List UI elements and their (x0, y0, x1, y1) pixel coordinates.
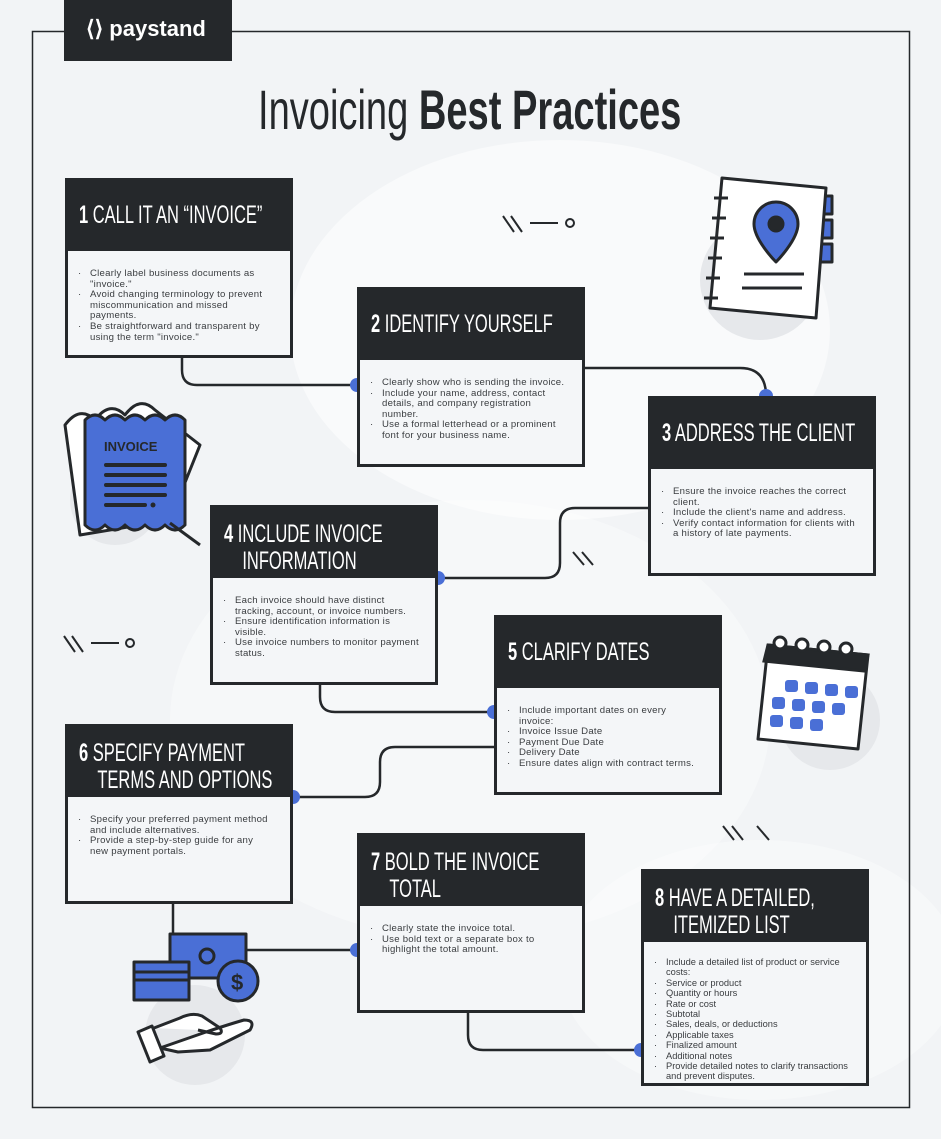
title: Invoicing Best Practices (258, 78, 681, 141)
box 4 (210, 505, 438, 685)
box 1: Be straightforward and transparent by using the term "invoice." (90, 321, 260, 343)
box 8: Additional notes (666, 1051, 732, 1061)
box 1 (65, 178, 293, 358)
box 5: Delivery Date (519, 747, 580, 758)
box 7: Clearly state the invoice total. (382, 923, 515, 934)
box 4: 4 INCLUDE INVOICE (224, 520, 383, 548)
box 4: Use invoice numbers to monitor payment status. (235, 637, 419, 659)
icon: calendar (756, 636, 880, 770)
box 8: Include a detailed list of product or service costs: (666, 957, 840, 977)
box 3: Include the client's name and address. (673, 507, 846, 518)
box 8 (641, 869, 869, 1086)
box 6: 6 SPECIFY PAYMENT (79, 739, 245, 767)
box 5: Invoice Issue Date (519, 726, 602, 737)
box 6: Specify your preferred payment method and include alternatives. (90, 814, 268, 836)
icon: payment hand (132, 932, 260, 1085)
box 8: Sales, deals, or deductions (666, 1019, 778, 1029)
box 7: 7 BOLD THE INVOICE (371, 848, 539, 876)
box 2 (357, 287, 585, 467)
hand (138, 1014, 252, 1062)
box 5: 5 CLARIFY DATES (508, 638, 650, 666)
box 1: 1 CALL IT AN “INVOICE” (79, 201, 262, 229)
box 7 (357, 833, 585, 1013)
box 3 (648, 396, 876, 576)
box 5: Payment Due Date (519, 737, 604, 748)
box 8: Subtotal (666, 1009, 700, 1019)
box 8: Service or product (666, 978, 741, 988)
box 6 (65, 724, 293, 904)
box 3: 3 ADDRESS THE CLIENT (662, 419, 855, 447)
box 2: Clearly show who is sending the invoice. (382, 377, 564, 388)
box 3: Verify contact information for clients with a history of late payments. (673, 518, 855, 539)
box 8: Quantity or hours (666, 988, 737, 998)
box 8: ITEMIZED LIST (673, 911, 790, 939)
icon: notebook (700, 176, 834, 340)
box 1: Clearly label business documents as "invoice." (90, 268, 254, 290)
logo (64, 0, 232, 61)
icon: invoice receipt: INVOICE (104, 439, 158, 454)
box 8: Rate or cost (666, 999, 716, 1009)
box 4: INFORMATION (242, 547, 357, 575)
box 4: Ensure identification information is visible. (235, 616, 390, 638)
box 1: Avoid changing terminology to prevent miscommunication and missed payments. (90, 289, 262, 321)
box 5 (494, 615, 722, 795)
box 8: 8 HAVE A DETAILED, (655, 884, 815, 912)
box 6: TERMS AND OPTIONS (97, 766, 272, 794)
icon: payment hand: $ (231, 970, 243, 995)
box 6: Provide a step-by-step guide for any new payment portals. (90, 835, 253, 857)
box 3: Ensure the invoice reaches the correct client. (673, 486, 846, 508)
box 7: TOTAL (389, 875, 441, 903)
box 8: Applicable taxes (666, 1030, 734, 1040)
box 7: Use bold text or a separate box to highlight the total amount. (382, 934, 534, 955)
box 8: Provide detailed notes to clarify transactions and prevent disputes. (666, 1061, 848, 1081)
box 2: Include your name, address, contact details, and company registration number. (382, 388, 545, 420)
logo: ⟨⟩ paystand (86, 16, 206, 41)
box 5: Include important dates on every invoice: (519, 705, 666, 727)
icon: invoice receipt (64, 402, 202, 546)
box 5: Ensure dates align with contract terms. (519, 758, 694, 769)
box 2: 2 IDENTIFY YOURSELF (371, 310, 553, 338)
box 8: Finalized amount (666, 1040, 737, 1050)
box 2: Use a formal letterhead or a prominent font for your business name. (382, 419, 556, 441)
box 4: Each invoice should have distinct tracking, account, or invoice numbers. (235, 595, 406, 617)
